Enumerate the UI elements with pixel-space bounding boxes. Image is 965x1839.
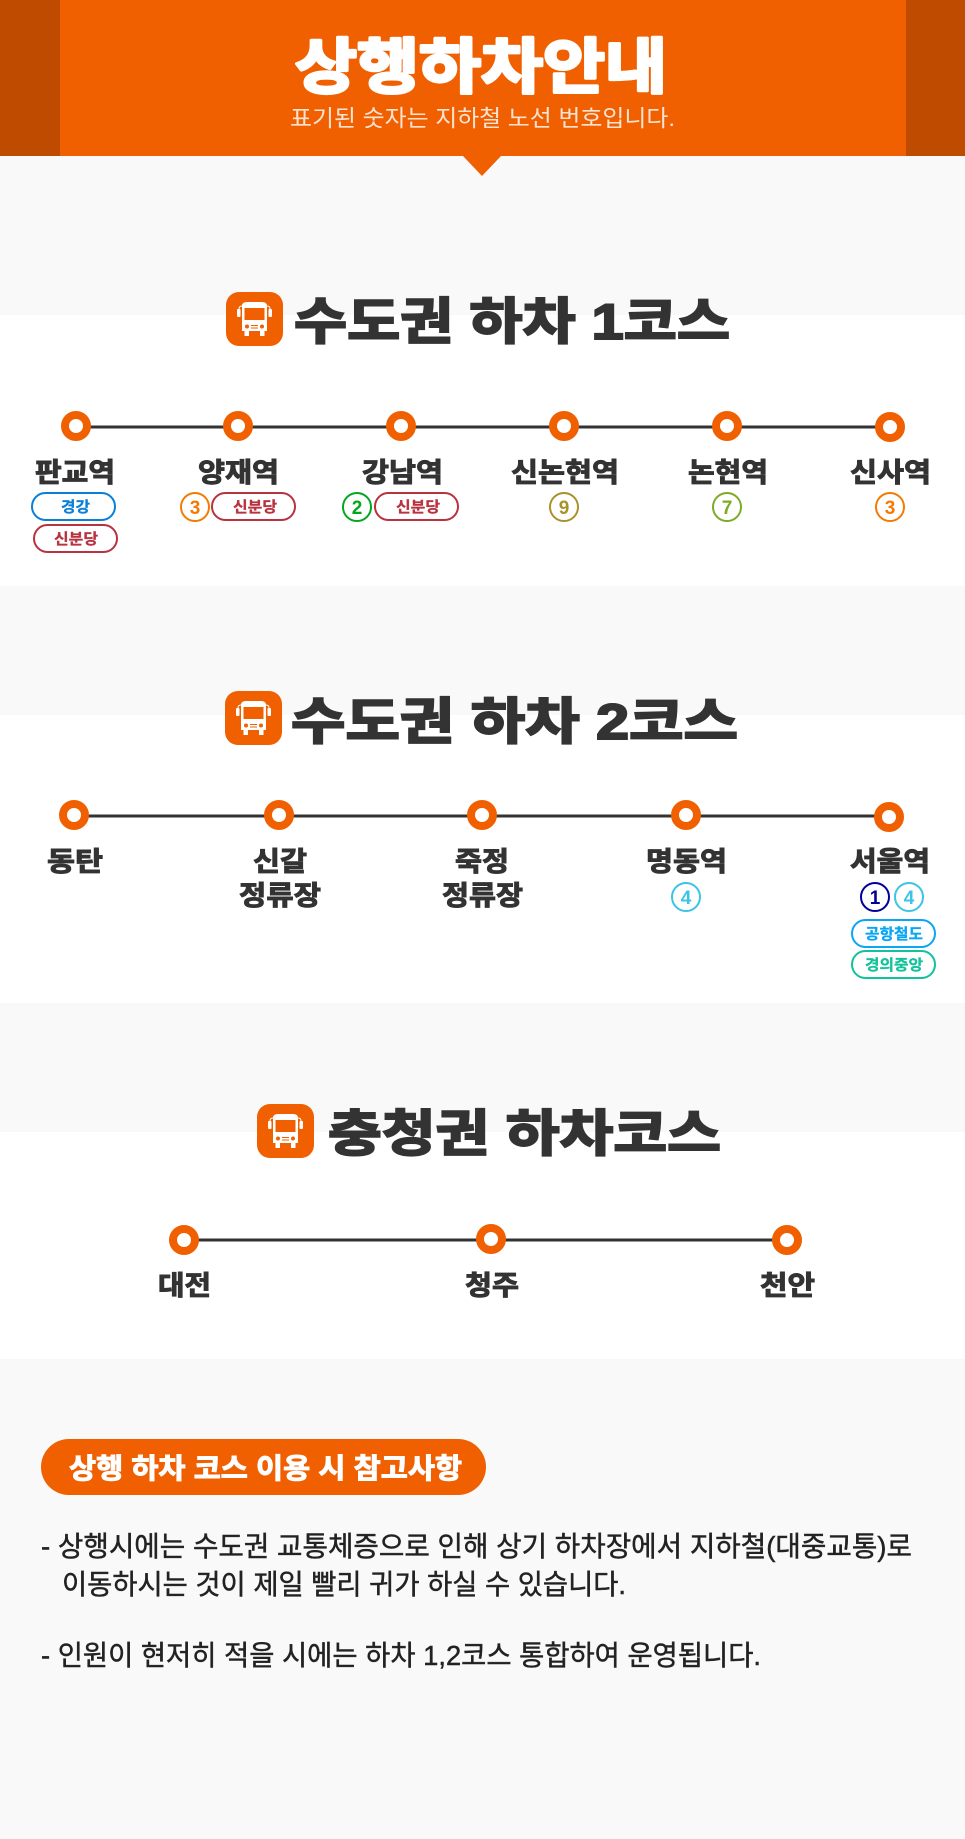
stop: 죽정 정류장: 죽정 bbox=[455, 847, 509, 877]
panel: gray band top bbox=[0, 156, 965, 315]
note text 1: 이동하시는 것이 제일 빨리 귀가 하실 수 있습니다. bbox=[62, 1569, 626, 1600]
panel: gray band 2 bbox=[0, 586, 965, 715]
stop: 논현역 bbox=[688, 415, 768, 521]
heading: chungcheong course: 충청권 하차코스 bbox=[328, 1106, 721, 1162]
heading: course 2: 수도권 하차 2코스 bbox=[291, 694, 738, 750]
stop: 서울역: 서울역 bbox=[850, 847, 930, 877]
header banner bbox=[0, 0, 965, 156]
stop: 청주: 청주 bbox=[465, 1271, 519, 1301]
stop: 양재역: 양재역 bbox=[198, 458, 279, 488]
stop: 명동역: 명동역 bbox=[646, 847, 727, 877]
stop: 강남역 bbox=[343, 415, 458, 521]
route line bbox=[76, 426, 890, 428]
pointer triangle bbox=[463, 156, 501, 176]
stop: 강남역: 강남역 bbox=[362, 458, 443, 488]
icon: bus bbox=[257, 1104, 314, 1158]
stop: 판교역 bbox=[32, 415, 117, 552]
stop: 신갈 정류장 bbox=[239, 804, 321, 911]
stop: 서울역: 공항철도 bbox=[865, 926, 923, 943]
stop: 명동역 bbox=[646, 804, 727, 911]
stop: 천안 bbox=[760, 1229, 815, 1301]
notes heading pill: 상행 하차 코스 이용 시 참고사항 bbox=[69, 1453, 462, 1484]
stop: 양재역: 3 bbox=[190, 498, 200, 519]
stop: 신논현역: 신논현역 bbox=[511, 458, 619, 488]
panel: metropolitan course 2 bbox=[47, 691, 935, 978]
stop: 신논현역 bbox=[511, 415, 619, 521]
stop: 신갈 정류장: 신갈 bbox=[253, 847, 307, 877]
stop: 대전 bbox=[158, 1229, 211, 1301]
panel: chungcheong course bbox=[158, 1104, 815, 1301]
panel: gray band 3 bbox=[0, 1003, 965, 1132]
stop: 죽정 정류장: 정류장 bbox=[442, 881, 523, 911]
note text 1 bbox=[41, 1531, 912, 1600]
route line bbox=[74, 814, 889, 818]
stop: 천안: 천안 bbox=[760, 1271, 815, 1301]
stop: 서울역: 4 bbox=[904, 888, 915, 909]
panel: notes bbox=[0, 1359, 965, 1839]
panel: metropolitan course 1 bbox=[32, 292, 931, 552]
stop: 신사역: 3 bbox=[885, 498, 895, 519]
stop: 서울역 bbox=[850, 806, 935, 978]
stop: 강남역: 신분당 bbox=[396, 499, 440, 516]
stop: 강남역: 2 bbox=[352, 498, 362, 519]
heading: course 1: 수도권 하차 1코스 bbox=[294, 294, 730, 350]
title: 상행하차안내 bbox=[295, 34, 667, 101]
stop: 판교역: 경강 bbox=[61, 499, 90, 516]
icon: bus bbox=[225, 691, 282, 745]
subtitle: 표기된 숫자는 지하철 노선 번호입니다. bbox=[290, 105, 675, 131]
stop: 판교역: 판교역 bbox=[35, 458, 115, 488]
stop: 서울역: 1 bbox=[870, 888, 881, 909]
route line bbox=[184, 1238, 787, 1242]
stop: 서울역: 경의중앙 bbox=[865, 957, 923, 974]
stop: 대전: 대전 bbox=[158, 1271, 211, 1301]
notes heading pill bbox=[41, 1439, 486, 1495]
stop: 동탄: 동탄 bbox=[47, 847, 103, 877]
stop: 판교역: 신분당 bbox=[54, 531, 98, 548]
icon: bus bbox=[226, 292, 283, 346]
stop: 신사역 bbox=[850, 416, 931, 521]
stop: 신사역: 신사역 bbox=[850, 458, 931, 488]
stop: 양재역 bbox=[181, 415, 295, 521]
stop: 명동역: 4 bbox=[681, 888, 692, 909]
stop: 신논현역: 9 bbox=[559, 498, 569, 519]
stop: 신갈 정류장: 정류장 bbox=[239, 881, 321, 911]
stop: 논현역: 7 bbox=[722, 498, 732, 519]
stop: 청주 bbox=[465, 1228, 519, 1301]
stop: 양재역: 신분당 bbox=[233, 499, 277, 516]
note text 1: - 상행시에는 수도권 교통체증으로 인해 상기 하차장에서 지하철(대중교통)로 bbox=[41, 1531, 912, 1562]
stop: 죽정 정류장 bbox=[442, 804, 523, 911]
note text 2: - 인원이 현저히 적을 시에는 하차 1,2코스 통합하여 운영됩니다. bbox=[41, 1640, 761, 1671]
stop: 논현역: 논현역 bbox=[688, 458, 768, 488]
stop: 동탄 bbox=[47, 804, 103, 877]
